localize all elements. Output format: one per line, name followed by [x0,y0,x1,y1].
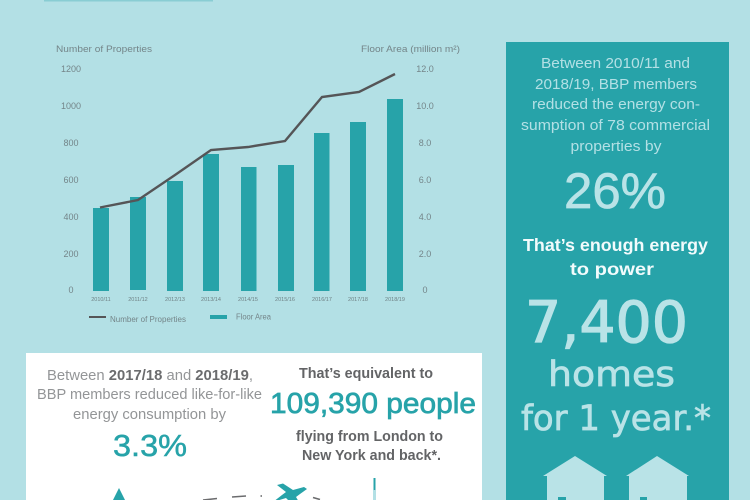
year labels: 2013/14 [201,297,221,303]
icon: house right [626,456,689,500]
year labels: 2014/15 [238,297,258,303]
icon: tower [373,478,376,500]
year labels: 2018/19 [385,297,405,303]
stat: 7,400: 7,400 [525,290,688,356]
right axis labels: 0 [422,285,428,295]
year labels: 2010/11 [91,297,111,303]
left axis labels: 1000 [61,101,81,111]
panel: energy reduction [506,42,729,500]
right axis labels: 2.0 [419,249,431,259]
left axis labels: 0 [68,285,74,295]
text: flying from London to New York: flying from London to [296,429,443,445]
text: enough energy: That’s enough energy [523,235,708,255]
left axis labels: 800 [63,138,79,148]
left axis labels: 1200 [61,64,81,74]
left axis labels [61,64,81,295]
year labels: 2015/16 [275,297,295,303]
year labels: 2017/18 [348,297,368,303]
stat: 109,390 people: 109,390 people [270,388,476,420]
legend: Number of Properties [110,315,186,324]
icon: flight path dashes [203,496,320,500]
panel: like-for-like reduction [26,353,482,500]
year labels: 2012/13 [165,297,185,303]
right axis title: Floor Area (million m²) [361,44,460,55]
number of properties line [100,74,395,208]
left axis labels: 400 [63,212,79,222]
text: reduction statement: Between 2010/11 and [541,55,690,72]
cropped title fragment [44,0,213,2]
text: equivalent: That’s equivalent to [299,366,433,382]
icon: landmark spire [112,488,126,500]
text: like-for-like statement [37,368,262,423]
legend: Floor Area [236,312,272,322]
floor area bars [93,99,403,291]
right axis labels: 10.0 [416,101,434,111]
year labels: 2016/17 [312,297,332,303]
text: like-for-like statement: BBP members reduced like-for-like [37,387,262,403]
right axis labels: 6.0 [419,175,431,185]
text: for 1 year: for 1 year.* [521,399,711,439]
chart: properties and floor area [56,44,460,324]
stat: 26%: 26% [564,163,666,219]
text: enough energy [523,235,708,279]
text: reduction statement: 2018/19, BBP members [535,76,697,93]
text: like-for-like statement: energy consumption by [73,407,227,423]
text: enough energy: to power [570,259,654,279]
text: like-for-like statement: Between 2017/18 and 2018/19, [47,368,253,384]
icon: plane [273,484,307,500]
legend [89,312,272,324]
text: reduction statement [521,55,710,155]
icon: house left [543,456,607,500]
text: reduction statement: sumption of 78 commercial [521,117,710,134]
text: flying from London to New York: New York and back*. [302,448,441,464]
left axis labels: 200 [63,249,79,259]
year labels: 2011/12 [128,297,148,303]
text: homes: homes [548,355,675,395]
year labels [91,297,405,303]
right axis labels [416,64,434,295]
right axis labels: 12.0 [416,64,434,74]
text: reduction statement: properties by [570,138,662,155]
left axis title: Number of Properties [56,44,152,55]
right axis labels: 8.0 [419,138,431,148]
text: flying from London to New York [296,429,443,464]
right axis labels: 4.0 [419,212,431,222]
stat: 3.3%: 3.3% [113,428,187,463]
text: reduction statement: reduced the energy con- [532,96,700,113]
left axis labels: 600 [63,175,79,185]
